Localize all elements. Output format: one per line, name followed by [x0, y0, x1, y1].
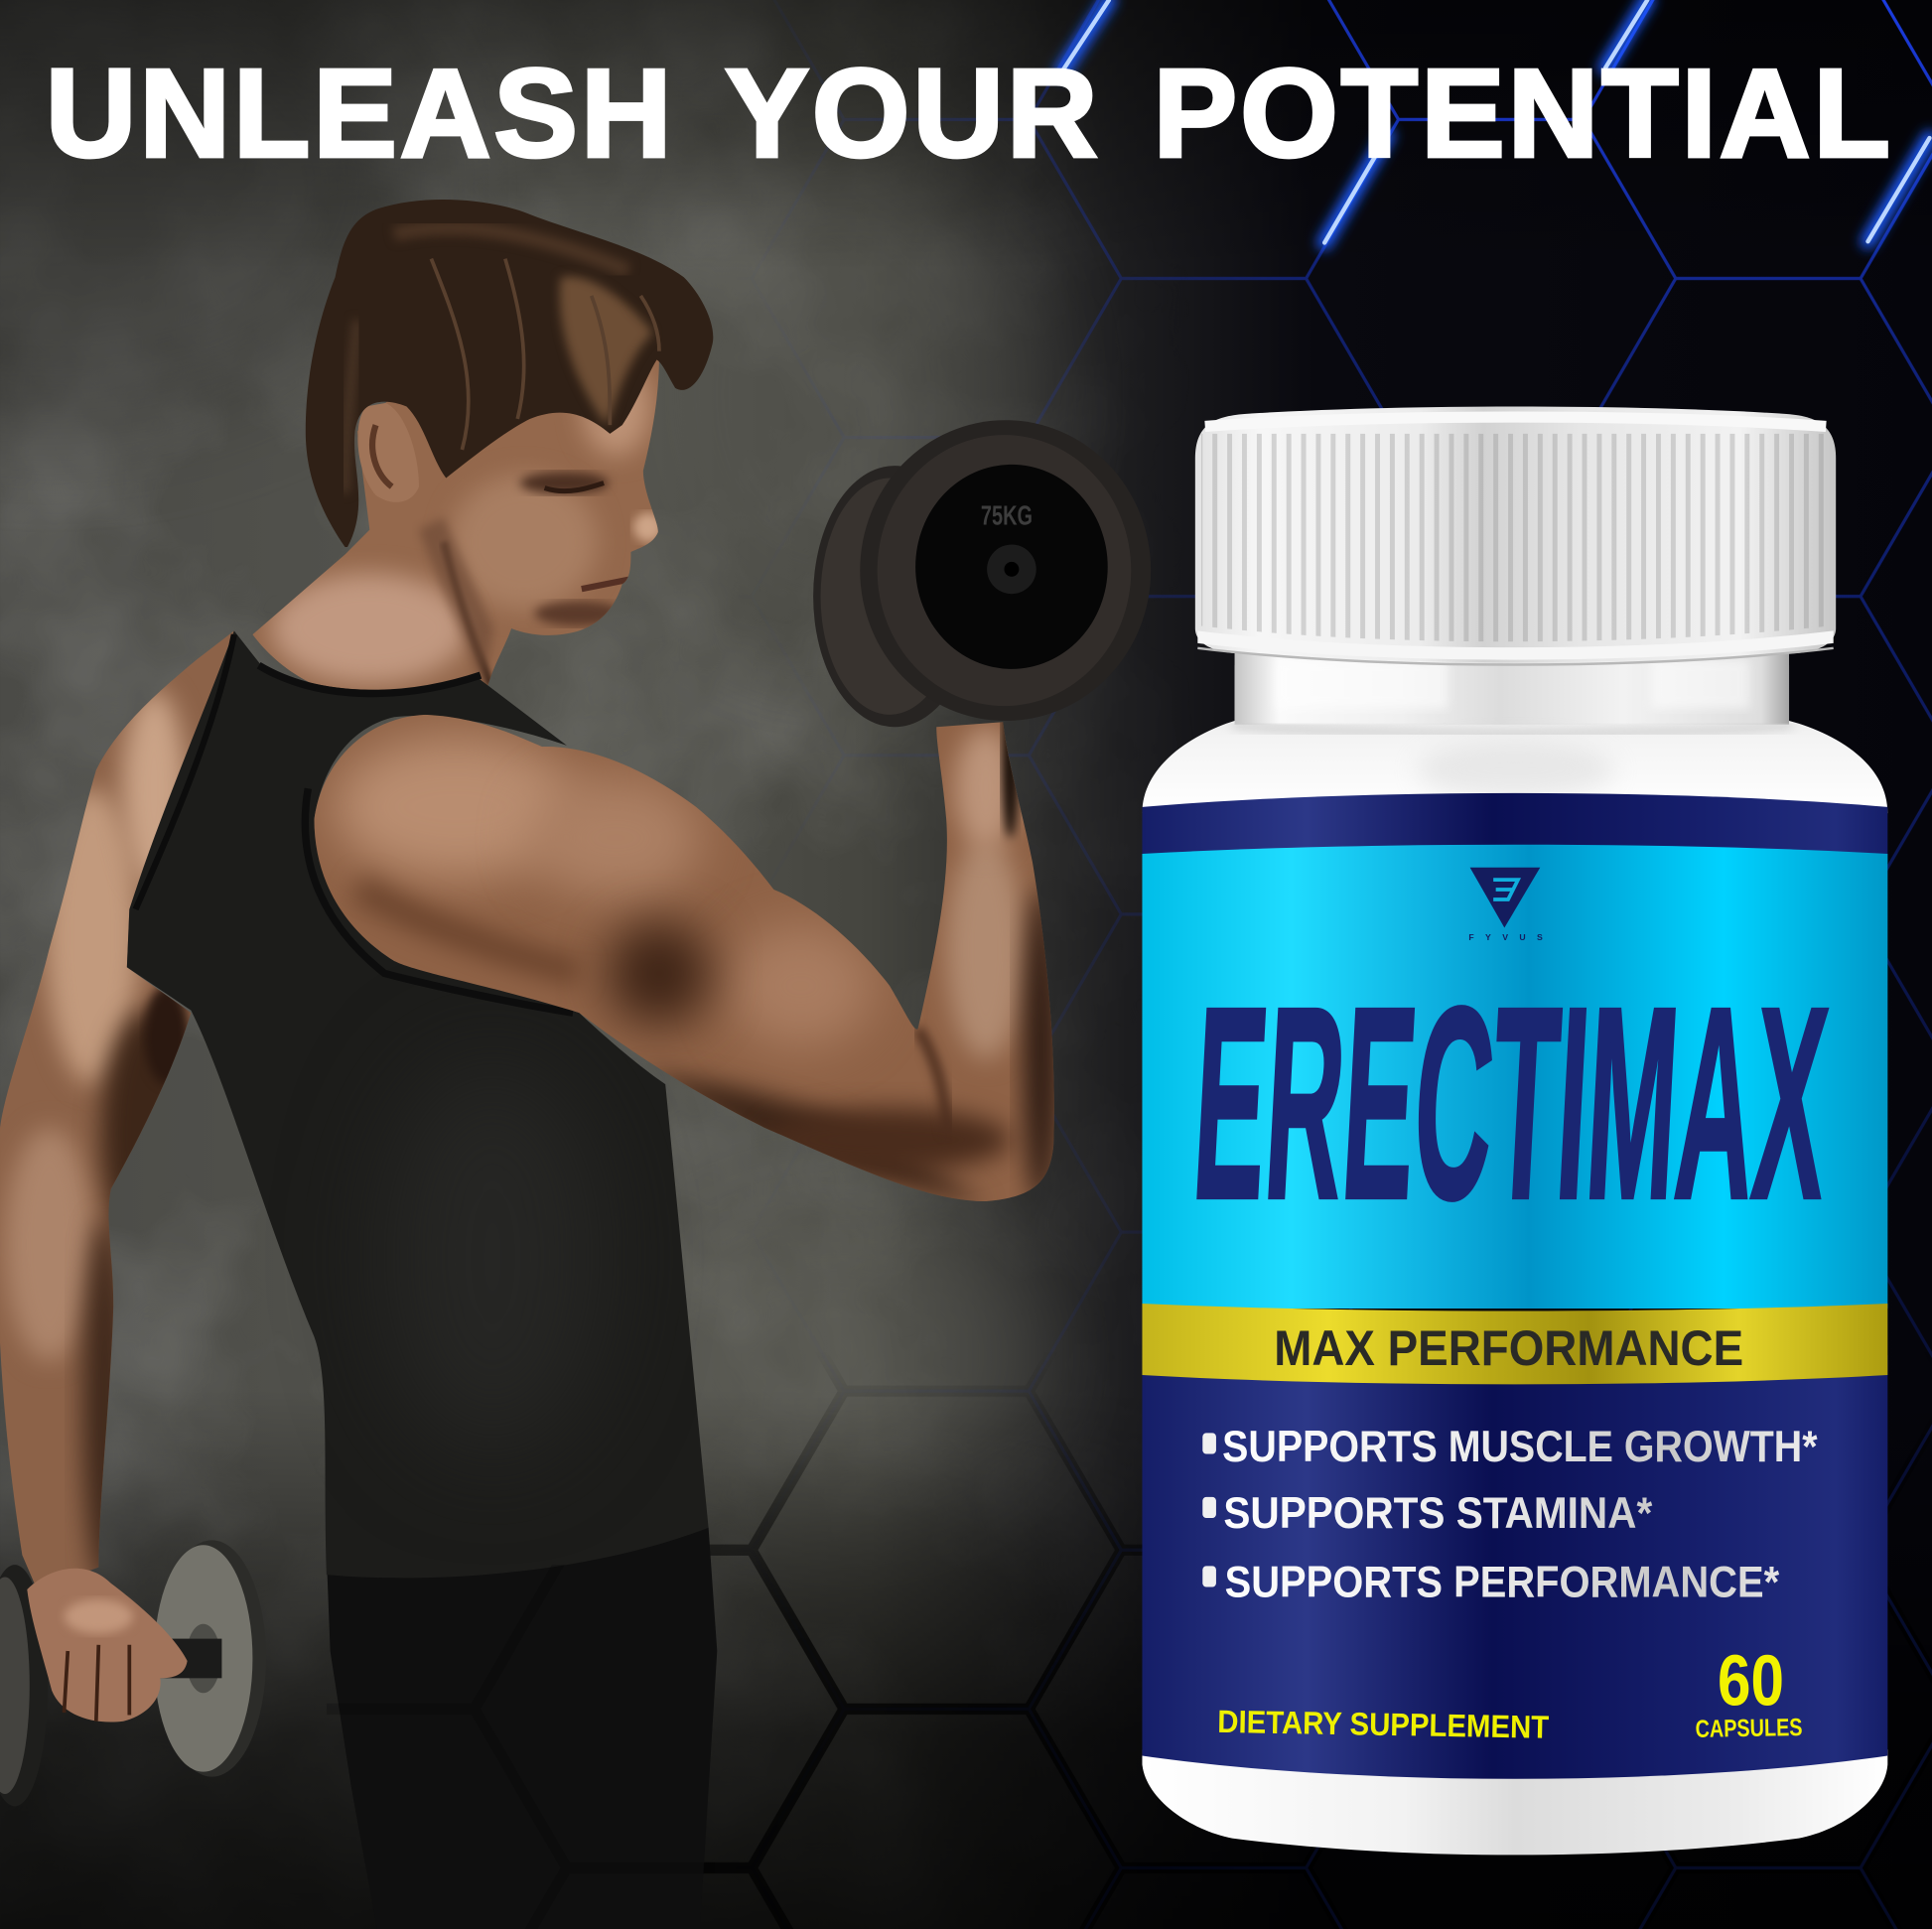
label: navy panel: [1142, 1355, 1887, 1779]
capsule count: 60: [1718, 1642, 1784, 1722]
capsule count: CAPSULES: [1695, 1715, 1803, 1743]
upper dumbbell: 75KG: [981, 500, 1033, 531]
glowing neon hexagon segments: [1062, 0, 1930, 242]
benefit list: [1202, 1423, 1818, 1606]
label: dark top band: [1142, 793, 1887, 863]
man lifting dumbbells: [0, 200, 1151, 1929]
label: yellow band: [1142, 1304, 1887, 1384]
shorts hexagon overlay: [327, 1565, 715, 1929]
hair highlights: [345, 227, 659, 492]
shorts: [327, 1528, 717, 1929]
bottle neck and shoulder: [1142, 650, 1887, 813]
ear: [357, 403, 419, 502]
logo: FYVUS: FYVUS: [1468, 932, 1543, 942]
tagline: MAX PERFORMANCE: [1274, 1320, 1743, 1376]
benefit list: SUPPORTS STAMINA*: [1223, 1489, 1653, 1538]
benefit list: SUPPORTS PERFORMANCE*: [1225, 1558, 1780, 1606]
label: cyan panel: [1142, 845, 1887, 1309]
tank top: [127, 630, 709, 1578]
bottle cap: [1195, 407, 1836, 665]
hair: [306, 200, 713, 547]
bottle base: [1142, 1749, 1887, 1855]
raised arm with muscle shading: [314, 715, 1054, 1201]
top shading: [136, 634, 604, 1453]
background: honeycomb lines: [703, 0, 1932, 1929]
rear arm: [0, 617, 246, 1601]
logo: FYVUS: [1468, 868, 1543, 942]
lower hand: [27, 1569, 188, 1722]
capsule count: [1695, 1642, 1803, 1743]
product bottle: [1142, 407, 1887, 1855]
benefit list: SUPPORTS MUSCLE GROWTH*: [1222, 1423, 1818, 1471]
dietary supplement: DIETARY SUPPLEMENT: [1217, 1704, 1550, 1745]
upper dumbbell: [813, 420, 1151, 727]
lower dumbbell: [0, 1540, 266, 1806]
title: UNLEASH YOUR POTENTIAL: [46, 43, 1890, 184]
neck and face: [252, 359, 659, 690]
